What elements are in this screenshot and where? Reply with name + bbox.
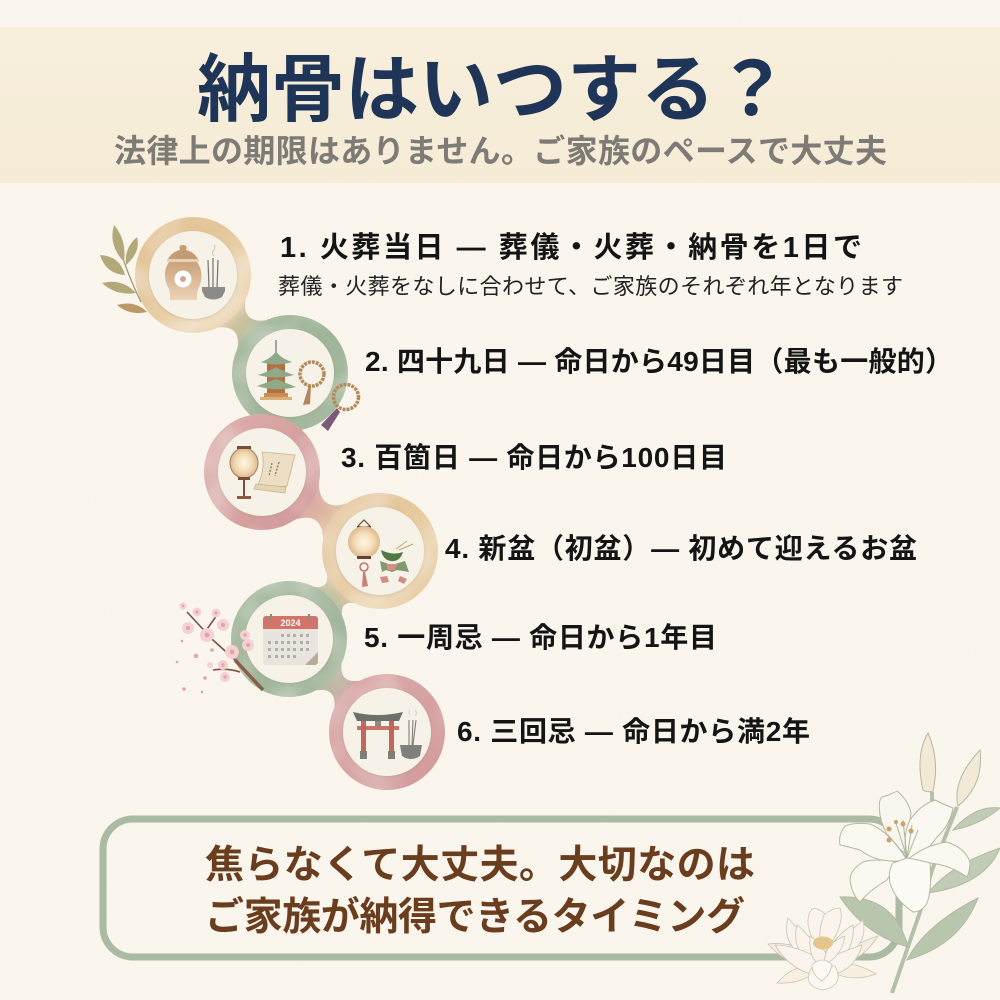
step 3 heading: 3. 百箇日 — 命日から100日目 xyxy=(341,442,727,473)
icon: lantern and scroll xyxy=(230,446,295,499)
step 5 heading: 5. 一周忌 — 命日から1年目 xyxy=(364,622,717,653)
step 4 heading: 4. 新盆（初盆）— 初めて迎えるお盆 xyxy=(445,533,917,564)
icon: calendar xyxy=(263,614,318,665)
decoration: lily xyxy=(840,733,1000,993)
callout text: 焦らなくて大丈夫。大切なのは xyxy=(205,844,755,887)
step 1 description: 葬儀・火葬をなしに合わせて、ご家族のそれぞれ年となります xyxy=(278,274,903,299)
icon: calendar: 2024 xyxy=(280,618,301,628)
decoration: leaf sprig xyxy=(100,225,147,313)
step 2 heading: 2. 四十九日 — 命日から49日目（最も一般的） xyxy=(365,346,953,377)
icon: pagoda and prayer beads xyxy=(257,340,324,405)
decoration: cherry blossom branch xyxy=(176,602,263,693)
callout xyxy=(103,819,899,957)
icon: bon lantern and offerings xyxy=(348,520,413,587)
step 6 heading: 6. 三回忌 — 命日から満2年 xyxy=(457,716,810,747)
title: 納骨はいつする？ xyxy=(197,48,789,131)
icon: outer prayer beads xyxy=(321,384,358,431)
decoration: lotus xyxy=(768,908,878,990)
icon: urn and incense xyxy=(165,245,225,300)
callout text: ご家族が納得できるタイミング xyxy=(205,896,745,939)
subtitle: 法律上の期限はありません。ご家族のペースで大丈夫 xyxy=(114,133,887,169)
icon: torii gate and incense xyxy=(353,710,422,759)
step 1 heading: 1. 火葬当日 — 葬儀・火葬・納骨を1日で xyxy=(280,231,862,264)
header banner xyxy=(0,27,1000,183)
connected circle timeline xyxy=(135,217,445,790)
